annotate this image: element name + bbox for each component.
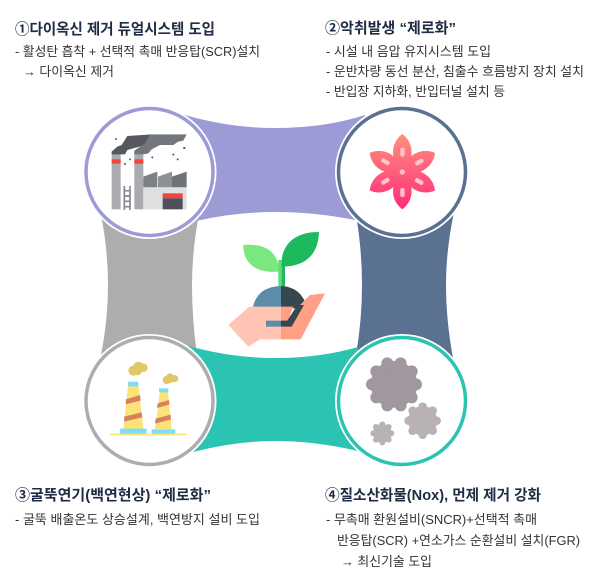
text: section 2: ②악취발생 “제로화” [325,20,456,37]
text: section 3: ③굴뚝연기(백연현상) “제로화” [15,487,211,504]
text: section 4: → 최신기술 도입 [341,554,432,569]
band: purple connector [185,115,365,221]
text: section 2: - 시설 내 음압 유지시스템 도입 [326,44,491,59]
text: section 4: - 무촉매 환원설비(SNCR)+선택적 촉매 [326,512,537,527]
circle: factory [82,105,216,239]
icon: seedling in hand [228,232,325,347]
icon: smog clouds [366,357,441,445]
text: section 2 [325,20,584,99]
circle: odor flower [335,105,469,239]
circle: chimneys [82,334,216,468]
band: teal connector [185,345,358,452]
band: gray connector [101,215,199,355]
icon: flower [370,134,435,209]
text: section 3: - 굴뚝 배출온도 상승설계, 백연방지 설비 도입 [15,512,260,527]
text: section 1: ①다이옥신 제거 듀얼시스템 도입 [15,21,215,38]
text: section 1: → 다이옥신 제거 [23,64,114,79]
text: section 1 [15,21,260,79]
circle: smog [335,334,469,468]
icon: factory [112,134,187,210]
text: section 3 [15,487,260,527]
text: section 2: - 운반차량 동선 분산, 침출수 흐름방지 장치 설치 [326,64,584,79]
icon: chimneys [110,362,187,435]
text: section 1: - 활성탄 흡착 + 선택적 촉매 반응탑(SCR)설치 [15,44,260,59]
text: section 2: - 반입장 지하화, 반입터널 설치 등 [326,84,505,99]
text: section 4 [325,487,580,569]
band: navy connector [356,212,454,358]
text: section 4: ④질소산화물(Nox), 먼제 제거 강화 [325,487,541,504]
text: section 4: 반응탑(SCR) +연소가스 순환설비 설치(FGR) [337,533,580,548]
